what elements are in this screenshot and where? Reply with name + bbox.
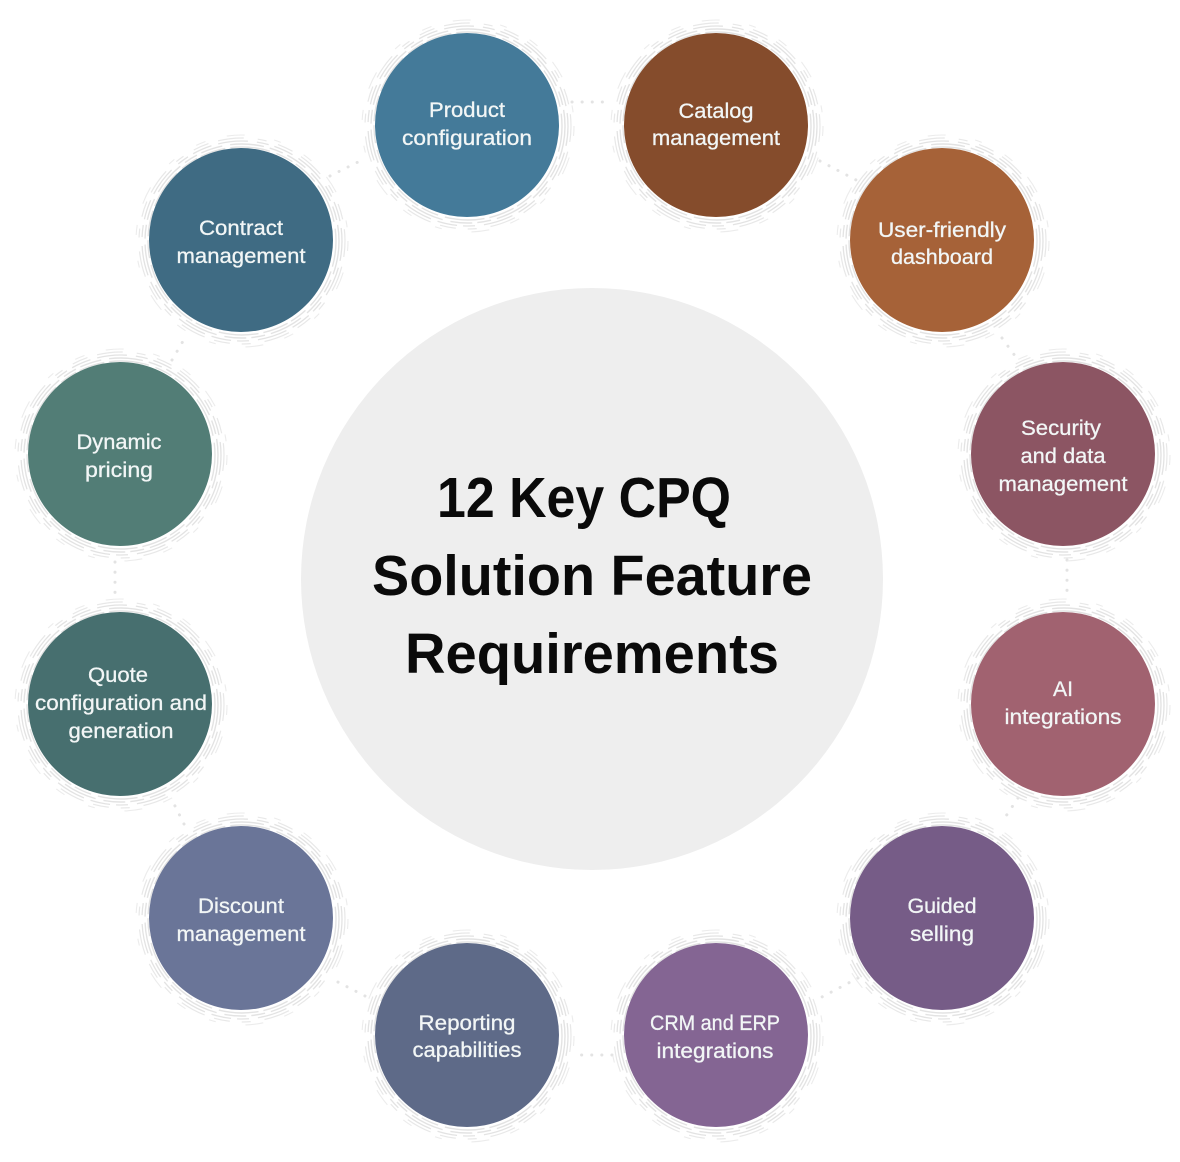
feature: AI integrations: AI [1053,677,1073,701]
feature: Dynamic pricing: pricing [85,458,153,482]
feature: Contract management: Contract [199,216,283,240]
feature: Discount management [136,813,348,1025]
title: Requirements [405,622,779,686]
feature: User-friendly dashboard: dashboard [891,245,993,269]
feature: Guided selling [837,813,1049,1025]
feature: Contract management [136,135,348,347]
feature: Reporting capabilities [362,930,574,1142]
feature: Security and data management: and data [1020,444,1106,468]
central circle with title [301,288,883,870]
feature: AI integrations: integrations [1004,705,1122,729]
feature: CRM and ERP integrations: integrations [656,1039,774,1063]
feature: Quote configuration and generation: Quote [88,663,148,687]
feature: Reporting capabilities: Reporting [418,1011,516,1035]
feature: Dynamic pricing: Dynamic [76,430,162,454]
connector dots between feature circles [115,102,1067,1055]
feature: Guided selling: Guided [908,894,976,918]
feature: CRM and ERP integrations: CRM and ERP [650,1011,780,1035]
feature: Product configuration [362,20,574,232]
title: Solution Feature [372,544,812,608]
feature: Quote configuration and generation: configuration and [35,691,207,715]
feature: Security and data management: Security [1021,416,1101,440]
feature: Product configuration: configuration [402,126,532,150]
feature: User-friendly dashboard: User-friendly [878,218,1006,242]
title: 12 Key CPQ [437,466,731,530]
feature: Product configuration: Product [429,98,505,122]
feature: Discount management: management [176,922,306,946]
feature: Dynamic pricing [15,349,227,561]
feature: Contract management: management [176,244,306,268]
feature: Reporting capabilities: capabilities [412,1038,522,1062]
feature: Catalog management [611,20,823,232]
feature: Catalog management: management [652,126,780,150]
feature: Security and data management [958,349,1170,561]
feature: User-friendly dashboard [837,135,1049,347]
feature: Guided selling: selling [910,922,974,946]
feature: Quote configuration and generation [15,599,227,811]
feature: Discount management: Discount [198,894,284,918]
feature: Quote configuration and generation: generation [68,719,174,743]
feature: AI integrations [958,599,1170,811]
feature: Security and data management: management [998,472,1128,496]
feature: CRM and ERP integrations [611,930,823,1142]
feature: Catalog management: Catalog [678,99,754,123]
title [372,466,812,686]
